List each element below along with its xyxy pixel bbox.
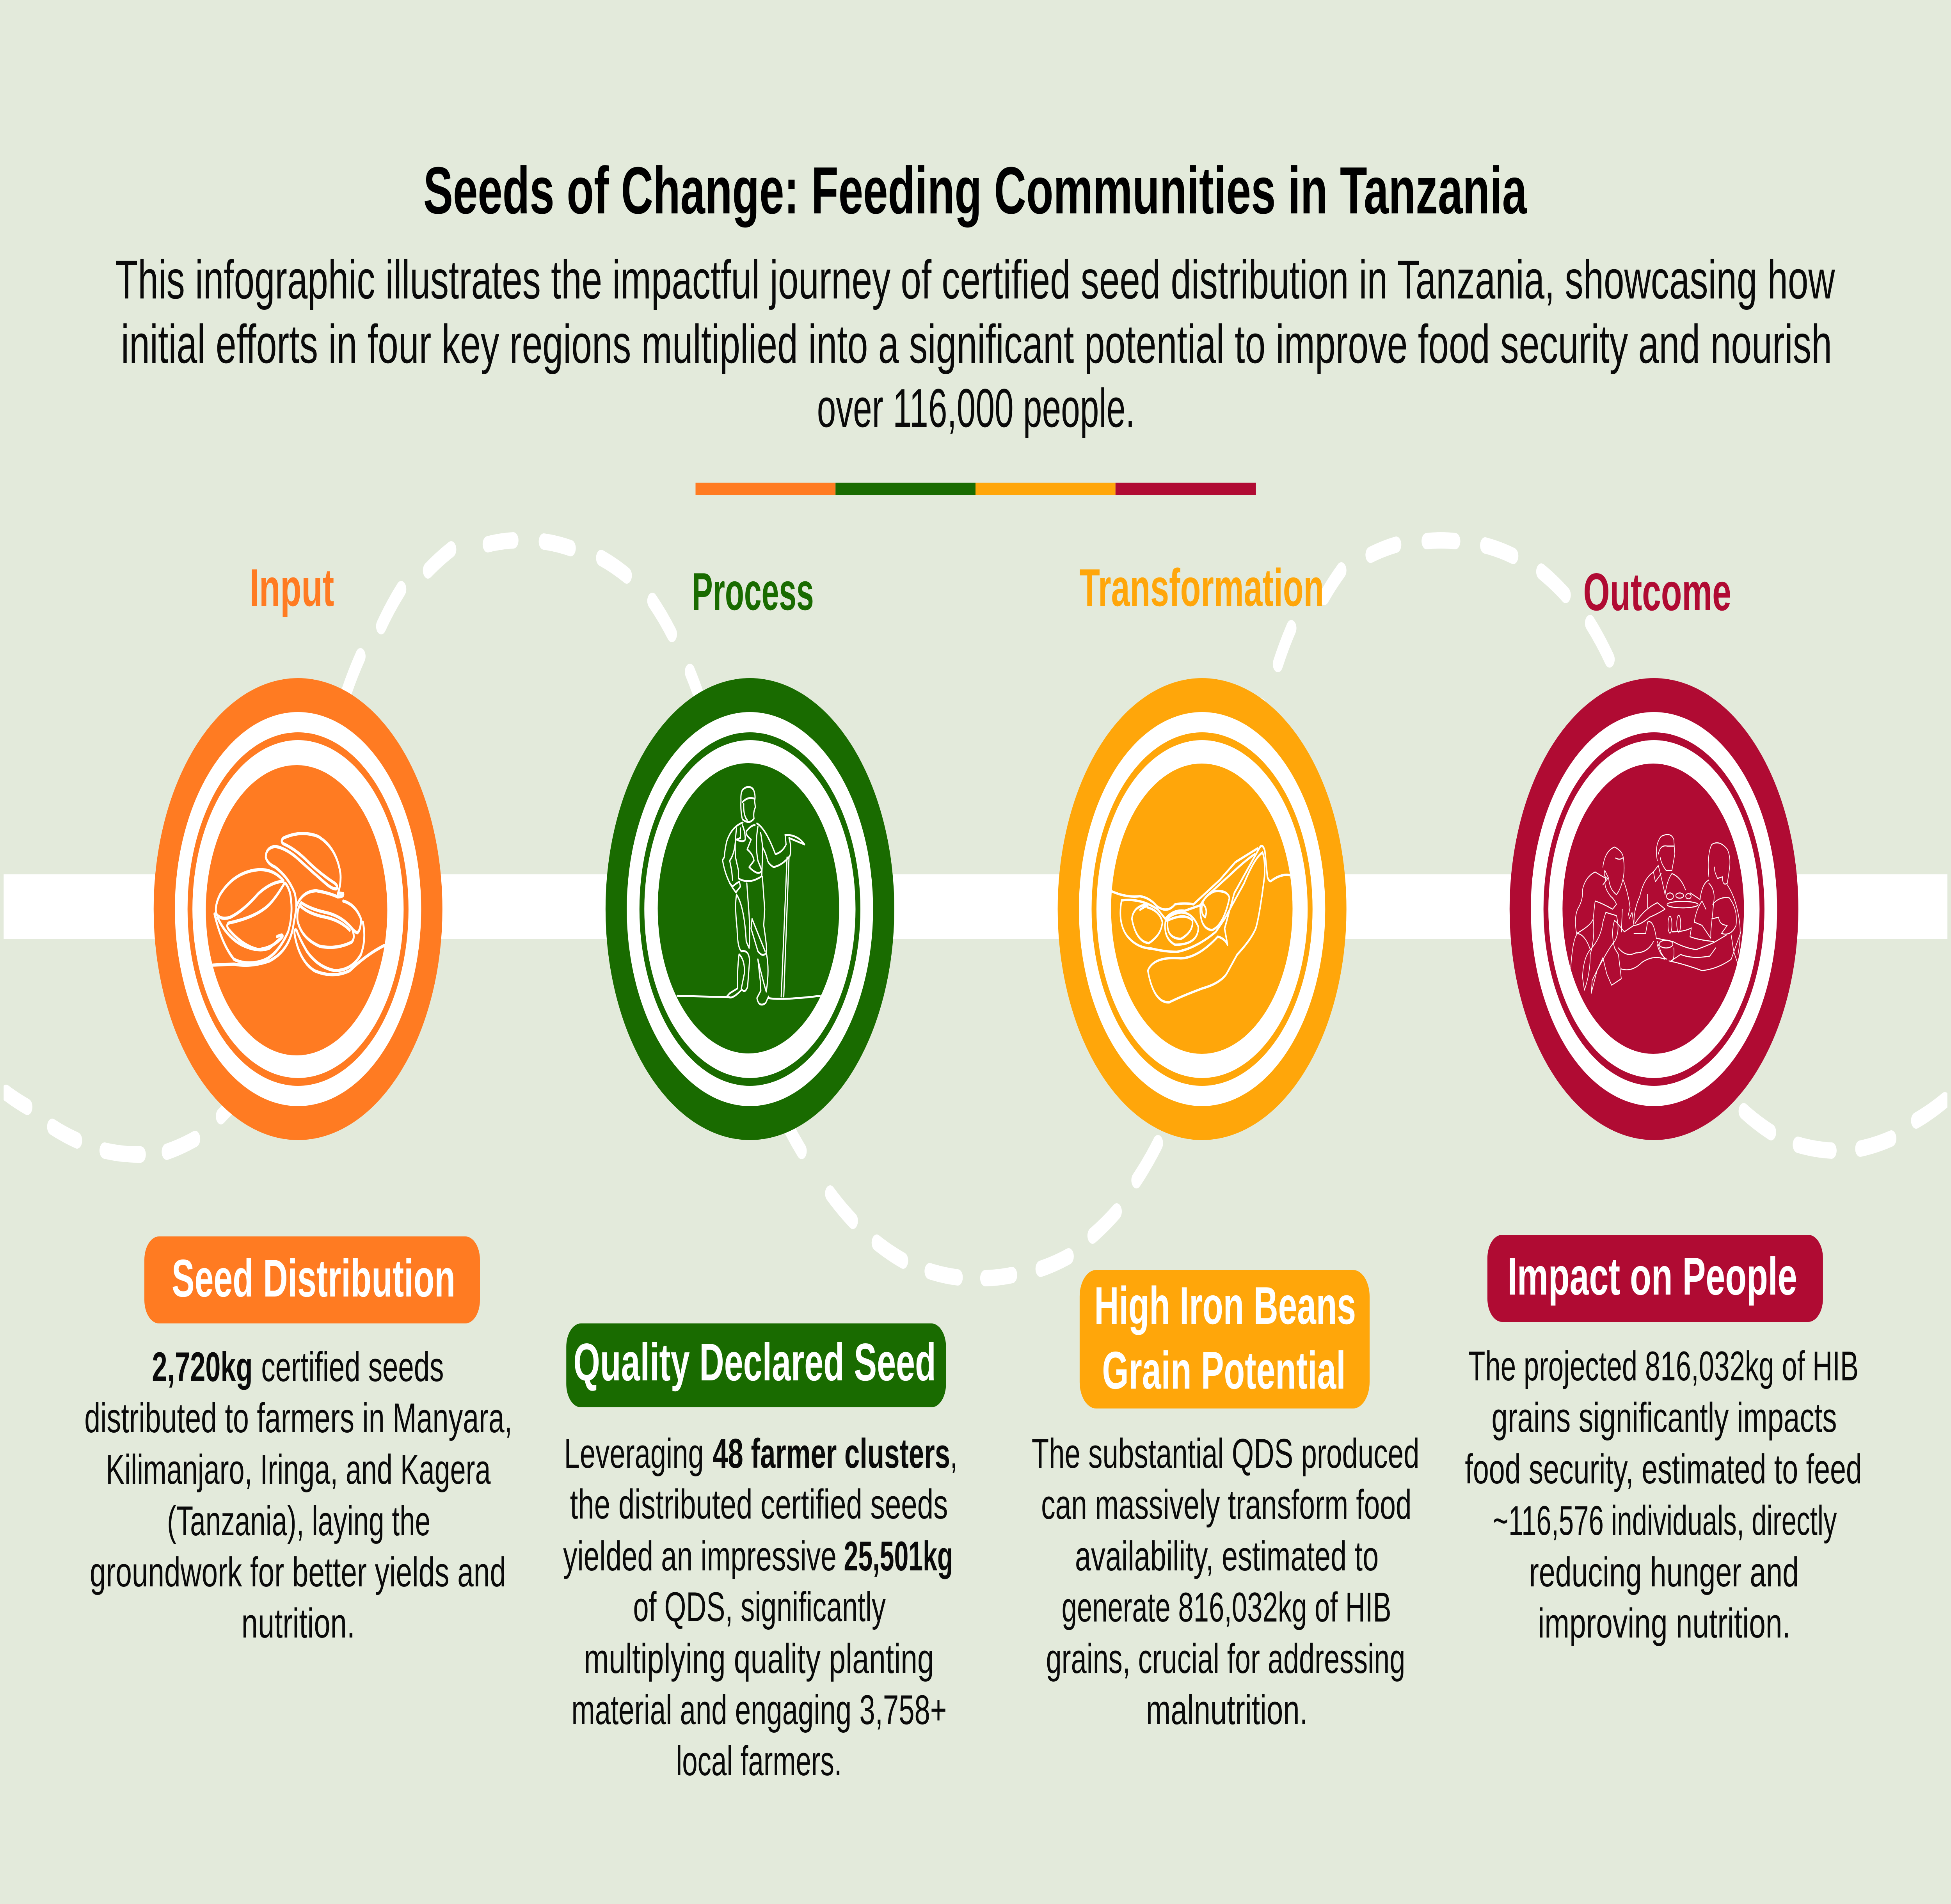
text block: transformation description: availability, estimated to bbox=[1075, 1533, 1379, 1579]
text block: outcome description: grains significantly impacts bbox=[1491, 1394, 1837, 1441]
text block: process description: , bbox=[950, 1430, 958, 1477]
text block: input description: certified seeds bbox=[261, 1343, 444, 1390]
text block: process description bbox=[563, 1430, 958, 1784]
ring medallion: farmer bbox=[606, 678, 894, 1140]
icon: seeds line art bbox=[213, 833, 384, 975]
intro paragraph bbox=[115, 249, 1835, 439]
text block: transformation description: generate 816,032kg of HIB bbox=[1062, 1584, 1391, 1630]
badge: impact on people bbox=[1487, 1235, 1823, 1322]
badge: quality declared seed bbox=[566, 1323, 946, 1407]
text block: input description: nutrition. bbox=[242, 1600, 355, 1646]
text block: transformation description bbox=[1032, 1430, 1420, 1733]
text block: outcome description: food security, estimated to feed bbox=[1465, 1446, 1862, 1492]
ring medallion: seeds bbox=[154, 678, 442, 1140]
badge: impact on people: Impact on People bbox=[1507, 1247, 1797, 1306]
icon: family sharing a meal line art bbox=[1571, 835, 1741, 993]
intro paragraph: initial efforts in four key regions multiplied into a significant potential to improve food security and nourish bbox=[121, 313, 1832, 375]
step label: transformation: Transformation bbox=[1079, 558, 1324, 618]
panel: input bbox=[84, 558, 512, 1646]
text block: input description: 2,720kg bbox=[152, 1343, 253, 1390]
badge: high iron beans grain potential: Grain Potential bbox=[1102, 1341, 1346, 1400]
text block: process description: the distributed certified seeds bbox=[570, 1481, 948, 1527]
badge: quality declared seed: Quality Declared Seed bbox=[573, 1333, 936, 1392]
badge: high iron beans grain potential: High Iron Beans bbox=[1094, 1276, 1356, 1336]
text block: process description: yielded an impressive bbox=[563, 1533, 837, 1579]
icon: farmer with hoe line art bbox=[677, 787, 820, 1005]
text block: transformation description: The substantial QDS produced bbox=[1032, 1430, 1420, 1477]
text block: process description: multiplying quality planting bbox=[584, 1635, 934, 1682]
step label: outcome: Outcome bbox=[1583, 563, 1731, 622]
panel: process bbox=[563, 562, 958, 1784]
ring medallion: family meal bbox=[1510, 678, 1798, 1140]
badge: seed distribution: Seed Distribution bbox=[172, 1249, 455, 1308]
text block: process description: of QDS, significantly bbox=[633, 1583, 886, 1630]
text block: outcome description: reducing hunger and bbox=[1529, 1549, 1799, 1595]
text block: outcome description: ~116,576 individuals, directly bbox=[1493, 1497, 1837, 1544]
text block: process description: local farmers. bbox=[676, 1737, 842, 1784]
horizontal white timeline bar bbox=[4, 874, 1947, 939]
text block: input description: Kilimanjaro, Iringa, and Kagera bbox=[106, 1446, 491, 1493]
intro paragraph: over 116,000 people. bbox=[817, 377, 1135, 439]
text block: transformation description: can massively transform food bbox=[1041, 1481, 1412, 1528]
ring medallion: beans bbox=[1058, 678, 1347, 1140]
text block: process description: material and engaging 3,758+ bbox=[571, 1686, 947, 1733]
text block: input description: groundwork for better yields and bbox=[90, 1549, 506, 1595]
badge: seed distribution bbox=[144, 1236, 480, 1323]
step label: process: Process bbox=[692, 562, 814, 622]
text block: process description: Leveraging bbox=[564, 1430, 704, 1477]
panel: outcome bbox=[1465, 563, 1862, 1646]
text block: transformation description: grains, crucial for addressing bbox=[1046, 1635, 1405, 1682]
title: Seeds of Change: Feeding Communities in Tanzania bbox=[423, 153, 1527, 228]
panel: transformation bbox=[1032, 558, 1420, 1733]
intro paragraph: This infographic illustrates the impactful journey of certified seed distribution in Tanzania, showcasing how bbox=[115, 249, 1835, 310]
text block: process description: 25,501kg bbox=[844, 1533, 953, 1579]
text block: process description: 48 farmer clusters bbox=[713, 1430, 950, 1477]
step label: input: Input bbox=[249, 558, 334, 618]
text block: outcome description bbox=[1465, 1343, 1862, 1646]
text block: outcome description: improving nutrition. bbox=[1538, 1600, 1791, 1646]
text block: input description: (Tanzania), laying the bbox=[167, 1497, 430, 1544]
icon: hand holding bean pod line art bbox=[1112, 846, 1290, 1002]
badge: high iron beans grain potential bbox=[1080, 1270, 1370, 1408]
text block: outcome description: The projected 816,032kg of HIB bbox=[1468, 1343, 1859, 1389]
four colour title rule bbox=[695, 483, 1256, 495]
text block: input description bbox=[84, 1343, 512, 1646]
text block: transformation description: malnutrition. bbox=[1146, 1686, 1308, 1733]
dashed wave connector bbox=[6, 540, 1945, 1278]
text block: input description: distributed to farmers in Manyara, bbox=[84, 1394, 512, 1441]
